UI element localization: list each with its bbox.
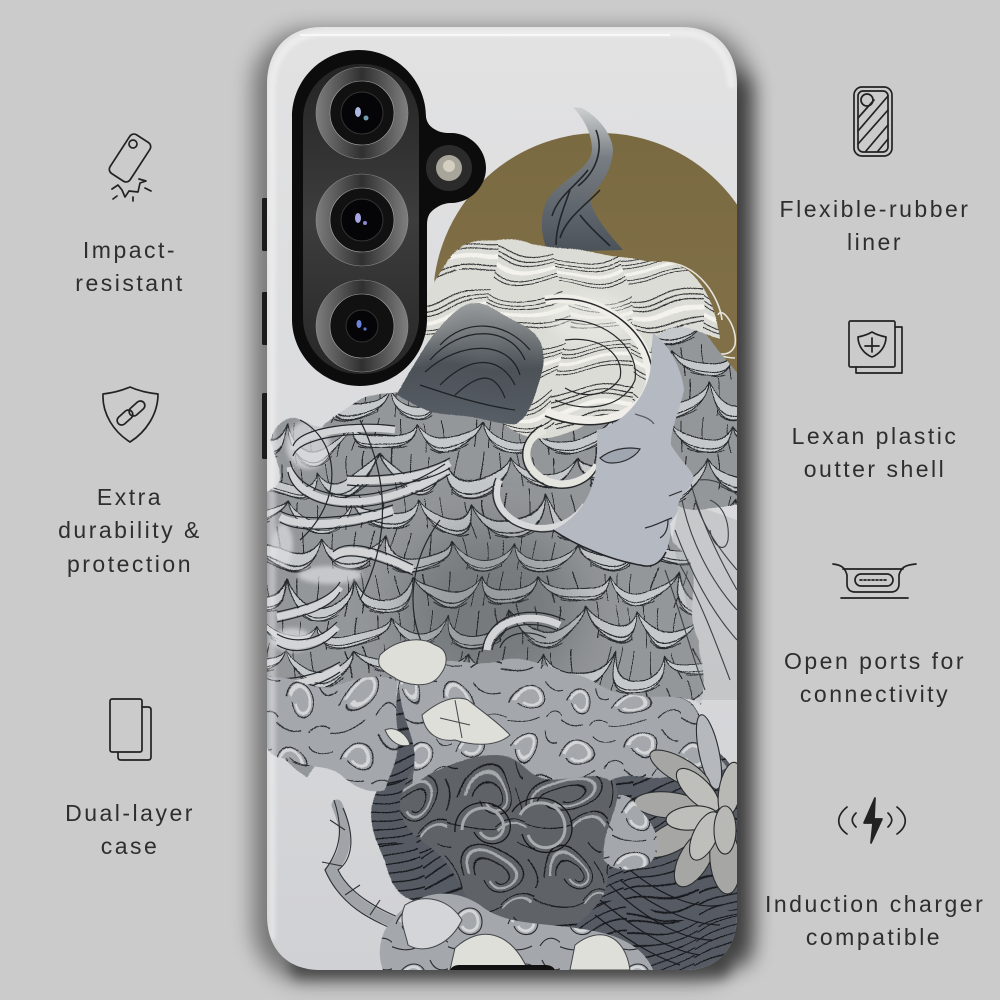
label: durability & — [58, 517, 202, 543]
feature: impact-resistant — [75, 133, 185, 296]
flash — [426, 145, 472, 191]
white flowers — [379, 640, 630, 970]
bottom port notch — [450, 965, 555, 970]
case glossy rim — [272, 33, 731, 940]
gold circle — [434, 133, 737, 372]
artwork clipped to case — [258, 33, 767, 985]
label: Impact- — [83, 237, 177, 263]
lens 2 — [316, 174, 408, 266]
icon: shield with link — [102, 386, 159, 443]
feature: extra durability — [58, 386, 202, 577]
label — [792, 423, 958, 482]
icon: lightning bolt with waves — [838, 797, 906, 844]
hair wisps on the gold circle — [662, 262, 735, 358]
eyebrow — [635, 414, 654, 424]
label: Flexible-rubber — [780, 196, 970, 222]
label: liner — [847, 229, 903, 255]
large right flower — [633, 713, 746, 895]
label: Open ports for — [784, 648, 966, 674]
label: Induction charger — [765, 891, 985, 917]
feature: dual-layer case — [65, 698, 195, 859]
case top highlight — [300, 34, 670, 36]
icon: two stacked layers — [109, 698, 152, 761]
pale gaps in the left hair — [270, 420, 364, 655]
label: Dual-layer — [65, 800, 195, 826]
side buttons — [262, 198, 269, 459]
striped dress lower right — [595, 870, 722, 965]
top curls of hair — [424, 238, 722, 431]
long hair strands on the left — [270, 420, 565, 690]
label — [780, 196, 970, 255]
label: compatible — [806, 924, 942, 950]
face — [553, 333, 694, 566]
icon: striped liner — [853, 86, 893, 157]
phone case illustration — [240, 16, 768, 996]
label: protection — [67, 551, 193, 577]
label — [784, 648, 966, 707]
eye — [600, 448, 640, 463]
leaf sprigs left — [258, 683, 395, 787]
case shadow — [253, 30, 753, 982]
label: resistant — [75, 270, 185, 296]
nose and mouth — [645, 491, 682, 538]
ornate centre of dress — [400, 755, 618, 928]
wreath sprig — [322, 800, 396, 927]
lines on lower horn — [420, 326, 530, 410]
big curl over forehead — [493, 299, 653, 532]
label — [765, 891, 985, 950]
label: connectivity — [800, 681, 950, 707]
label — [65, 800, 195, 859]
camera island — [292, 50, 486, 386]
lens 3 — [316, 280, 408, 372]
label: case — [101, 833, 159, 859]
label: Lexan plastic — [792, 423, 958, 449]
label — [75, 237, 185, 296]
curled ornament beside flower — [610, 797, 656, 874]
darker centre hair shade — [400, 525, 580, 695]
icon: shield on layered square — [848, 320, 903, 374]
phone case body — [267, 27, 737, 970]
label: outter shell — [804, 456, 946, 482]
label — [58, 484, 202, 577]
dark lower horn — [392, 311, 541, 422]
hair right of the face — [651, 326, 737, 510]
lens 1 — [316, 67, 408, 159]
label: Extra — [97, 484, 163, 510]
feature: flexible-rubber liner — [780, 86, 970, 255]
icon: USB-C port — [832, 563, 917, 599]
flowing hair mass — [258, 360, 705, 775]
upper horn — [542, 107, 623, 252]
gray wash beside the chin — [672, 500, 737, 700]
upper floral band — [395, 660, 725, 790]
dress — [374, 690, 755, 985]
icon: dropped phone — [108, 133, 152, 202]
feature: lexan plastic shell — [792, 320, 958, 482]
feature: induction charging — [765, 797, 985, 950]
pale highlight on crown — [548, 292, 632, 344]
feature: open ports — [784, 563, 966, 707]
sparse wisps beside the chin — [665, 480, 737, 690]
lower leaves — [380, 894, 655, 975]
large swirls on dress — [455, 798, 572, 852]
